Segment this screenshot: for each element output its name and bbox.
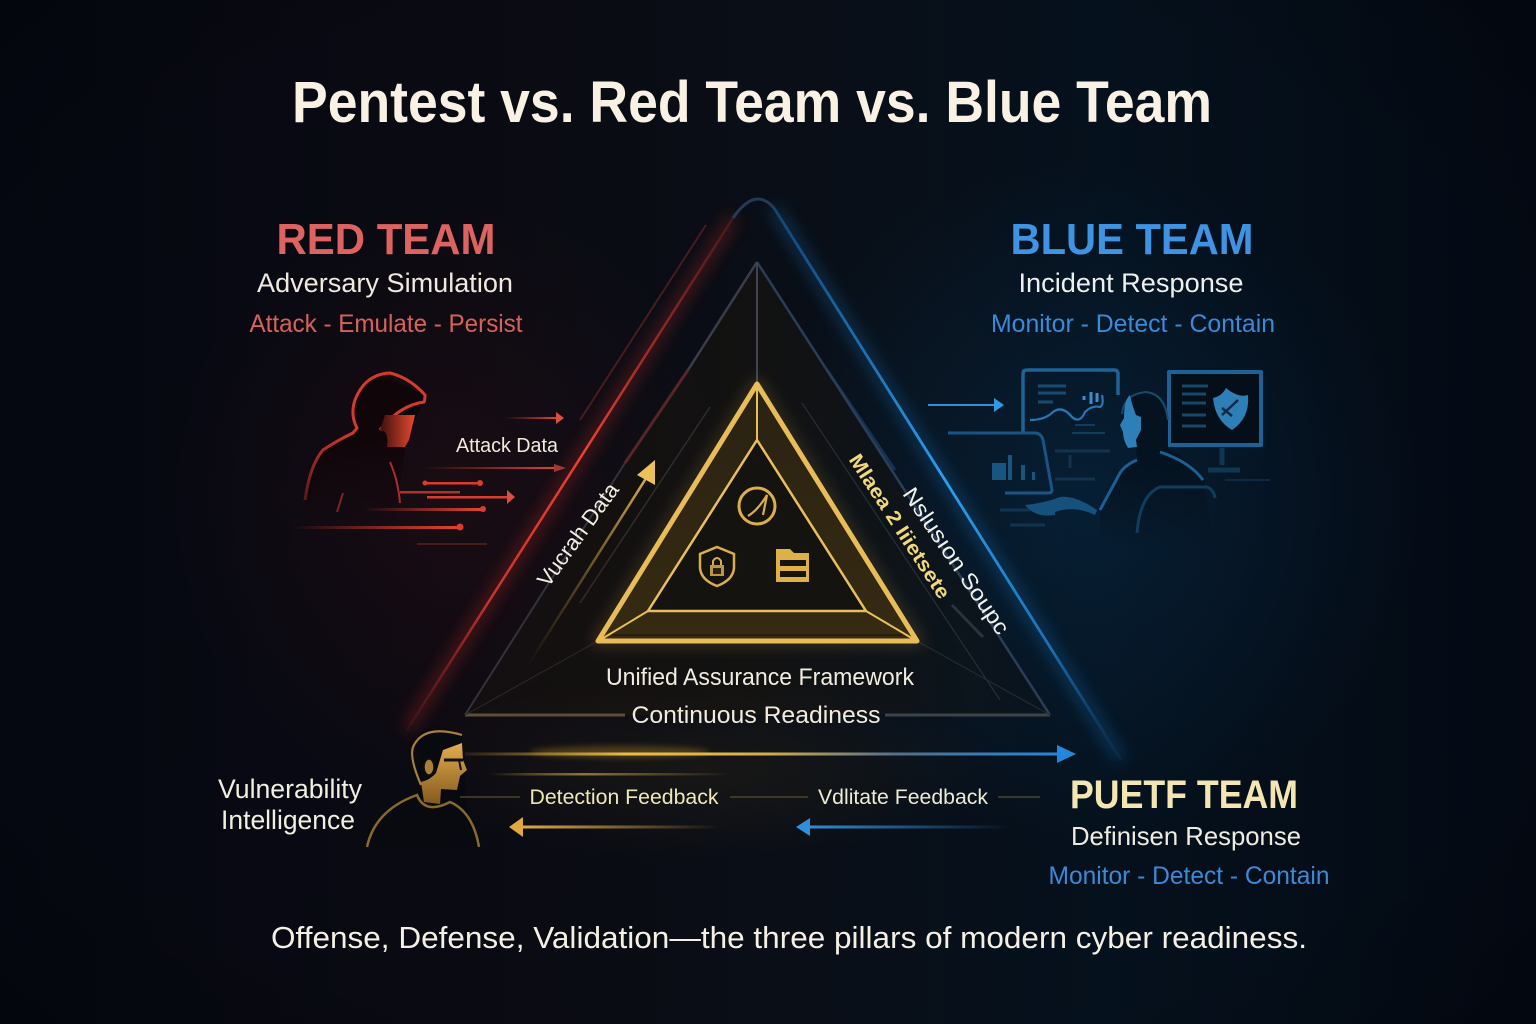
icon: compass seal xyxy=(739,488,775,524)
blue team heading: BLUE TEAM xyxy=(1010,215,1254,264)
monitor left xyxy=(1023,370,1118,479)
feedback labels xyxy=(460,786,1040,809)
tagline: Offense, Defense, Validation—the three pillars of modern cyber readiness. xyxy=(271,920,1307,955)
pentest team heading: Monitor - Detect - Contain xyxy=(1048,862,1330,890)
pentest team heading xyxy=(1048,773,1330,890)
framework labels xyxy=(606,664,915,729)
feedback labels: Vdlitate Feedback xyxy=(818,786,988,809)
outer triangle xyxy=(407,199,1121,760)
rotated label white: Nslusıon Soupc xyxy=(898,483,1015,639)
analyst figure xyxy=(1100,392,1215,550)
gold return arrow xyxy=(509,817,720,837)
top flow arrow xyxy=(465,745,1076,776)
icon: gold pentester xyxy=(367,727,479,850)
vulnerability intelligence label xyxy=(218,774,362,835)
gold arrow up xyxy=(525,460,655,670)
pentest team heading: PUETF TEAM xyxy=(1070,773,1298,817)
icon: blue analyst with monitors xyxy=(948,370,1270,550)
blue return arrow xyxy=(796,818,1010,836)
icon: red hooded attacker xyxy=(300,373,425,525)
blue arrow to analyst xyxy=(928,398,1004,412)
pentest team heading: Definisen Response xyxy=(1071,821,1301,851)
framework labels: Unified Assurance Framework xyxy=(606,664,915,691)
framework labels: Continuous Readiness xyxy=(632,702,880,729)
vulnerability intelligence label: Intelligence xyxy=(221,805,355,835)
middle triangle xyxy=(465,262,1050,715)
laptop xyxy=(948,433,1052,525)
red team heading: RED TEAM xyxy=(276,215,496,264)
icon: shield lock xyxy=(700,547,734,586)
attack data label: Attack Data xyxy=(456,435,559,457)
monitor right xyxy=(1169,372,1270,480)
blue team heading xyxy=(991,215,1275,338)
feedback labels: Detection Feedback xyxy=(530,786,719,809)
rotated data label: vulnerability data: Vucrah Data xyxy=(532,477,624,591)
vulnerability intelligence label: Vulnerability xyxy=(218,774,362,804)
blue team heading: Monitor - Detect - Contain xyxy=(991,310,1275,338)
blue team heading: Incident Response xyxy=(1018,268,1244,298)
rotated label gold: Mlaea 2 Iiietsete xyxy=(844,450,954,603)
red team heading: Adversary Simulation xyxy=(257,268,513,298)
gold central triangle xyxy=(598,384,917,641)
red attack arrows xyxy=(290,412,566,545)
red team heading xyxy=(250,215,523,338)
icon: folder xyxy=(776,549,809,582)
title: Pentest vs. Red Team vs. Blue Team xyxy=(292,70,1212,135)
red team heading: Attack - Emulate - Persist xyxy=(250,310,523,338)
